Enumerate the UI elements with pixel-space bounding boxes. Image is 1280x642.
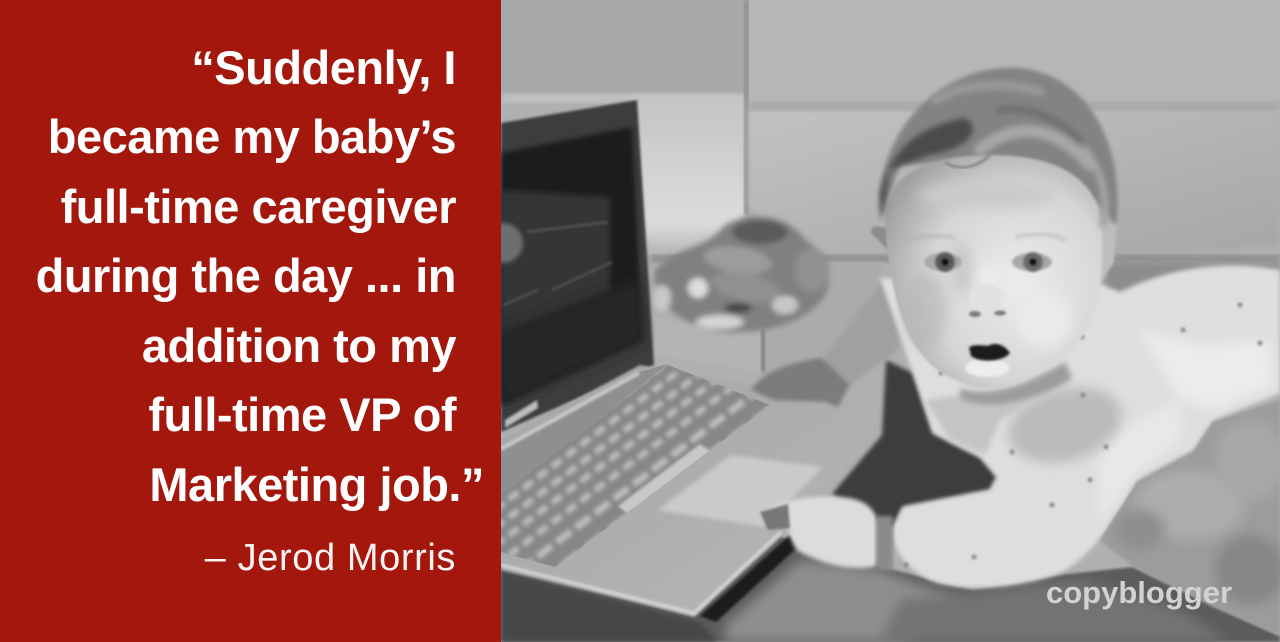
baby shoulder shading bbox=[1000, 375, 1130, 475]
neck shadow bbox=[960, 362, 1072, 404]
laptop base bbox=[501, 365, 895, 616]
copyblogger logo: copyblogger bbox=[1046, 575, 1232, 610]
baby face bbox=[885, 155, 1102, 389]
photo: baby with laptop bbox=[501, 0, 1280, 642]
quote text: during the day ... in bbox=[36, 249, 456, 302]
baby hair back bbox=[879, 68, 1117, 225]
baby ears bbox=[1098, 222, 1117, 284]
quote text: Marketing job.” bbox=[149, 458, 484, 511]
laptop front edge bbox=[501, 532, 781, 613]
stuffed toy bbox=[653, 217, 830, 332]
laptop screen bbox=[483, 100, 654, 432]
quote text bbox=[36, 41, 484, 511]
quote text: full-time VP of bbox=[148, 388, 456, 441]
baby left hand bbox=[751, 358, 850, 407]
baby mouth bbox=[965, 344, 1010, 377]
attribution: – Jerod Morris bbox=[205, 537, 456, 579]
baby hair dark band bbox=[880, 118, 973, 220]
quote text: addition to my bbox=[142, 319, 456, 372]
hair curl bbox=[945, 155, 990, 167]
baby trousers bbox=[832, 360, 997, 527]
baby lower back shading bbox=[1140, 330, 1275, 410]
baby hair strands bbox=[935, 85, 1105, 225]
baby front hand bbox=[761, 497, 878, 568]
sofa background bbox=[501, 0, 1280, 642]
baby eyes bbox=[924, 252, 1052, 272]
quote text: “Suddenly, I bbox=[191, 41, 456, 94]
baby face shading bbox=[903, 181, 1073, 348]
sofa seat bbox=[765, 262, 885, 380]
quote text: became my baby’s bbox=[48, 110, 456, 163]
baby torso and sleeve bbox=[880, 265, 1280, 587]
laptop brand mark bbox=[505, 400, 538, 428]
baby brows bbox=[905, 234, 1065, 242]
blanket foreground bbox=[501, 535, 1280, 642]
trackpad bbox=[658, 455, 823, 527]
baby nose bbox=[969, 283, 1006, 317]
laptop bbox=[501, 98, 822, 617]
laptop hinge highlight bbox=[501, 373, 639, 449]
fluffy blanket bbox=[1100, 400, 1280, 636]
baby bbox=[751, 68, 1280, 636]
keyboard bbox=[501, 365, 770, 567]
shirt star dots bbox=[904, 302, 1262, 568]
quote text: full-time caregiver bbox=[61, 180, 456, 233]
baby left arm bbox=[821, 277, 906, 385]
panel: red quote background bbox=[0, 0, 501, 642]
